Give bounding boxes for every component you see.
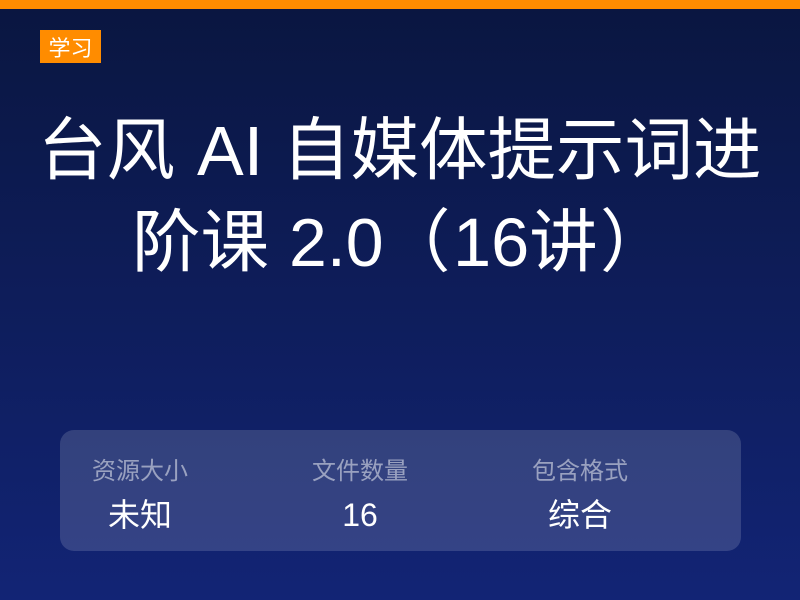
category tag: 学习 (48, 36, 92, 61)
title: 台风 (38, 112, 175, 189)
stat: file count (312, 458, 408, 533)
title: AI (197, 112, 263, 190)
title (38, 112, 762, 281)
stat: file count: 16 (342, 497, 378, 533)
stat: resource size: 未知 (108, 497, 172, 533)
stat: file count: 文件数量 (312, 458, 408, 485)
title: 2.0 (289, 205, 384, 281)
panel: resource stats (60, 430, 741, 551)
stat: format (532, 458, 628, 533)
stat: format: 综合 (548, 497, 612, 533)
title: 自媒体提示词进 (282, 112, 762, 189)
category tag (40, 30, 101, 63)
title: 阶课 (132, 204, 269, 281)
stat: resource size (92, 458, 188, 533)
stat: resource size: 资源大小 (92, 458, 188, 485)
title: （ (382, 204, 451, 281)
stat: format: 包含格式 (532, 458, 628, 485)
title: 16讲 (453, 204, 598, 281)
title: ） (600, 204, 669, 281)
top accent bar (0, 0, 800, 9)
